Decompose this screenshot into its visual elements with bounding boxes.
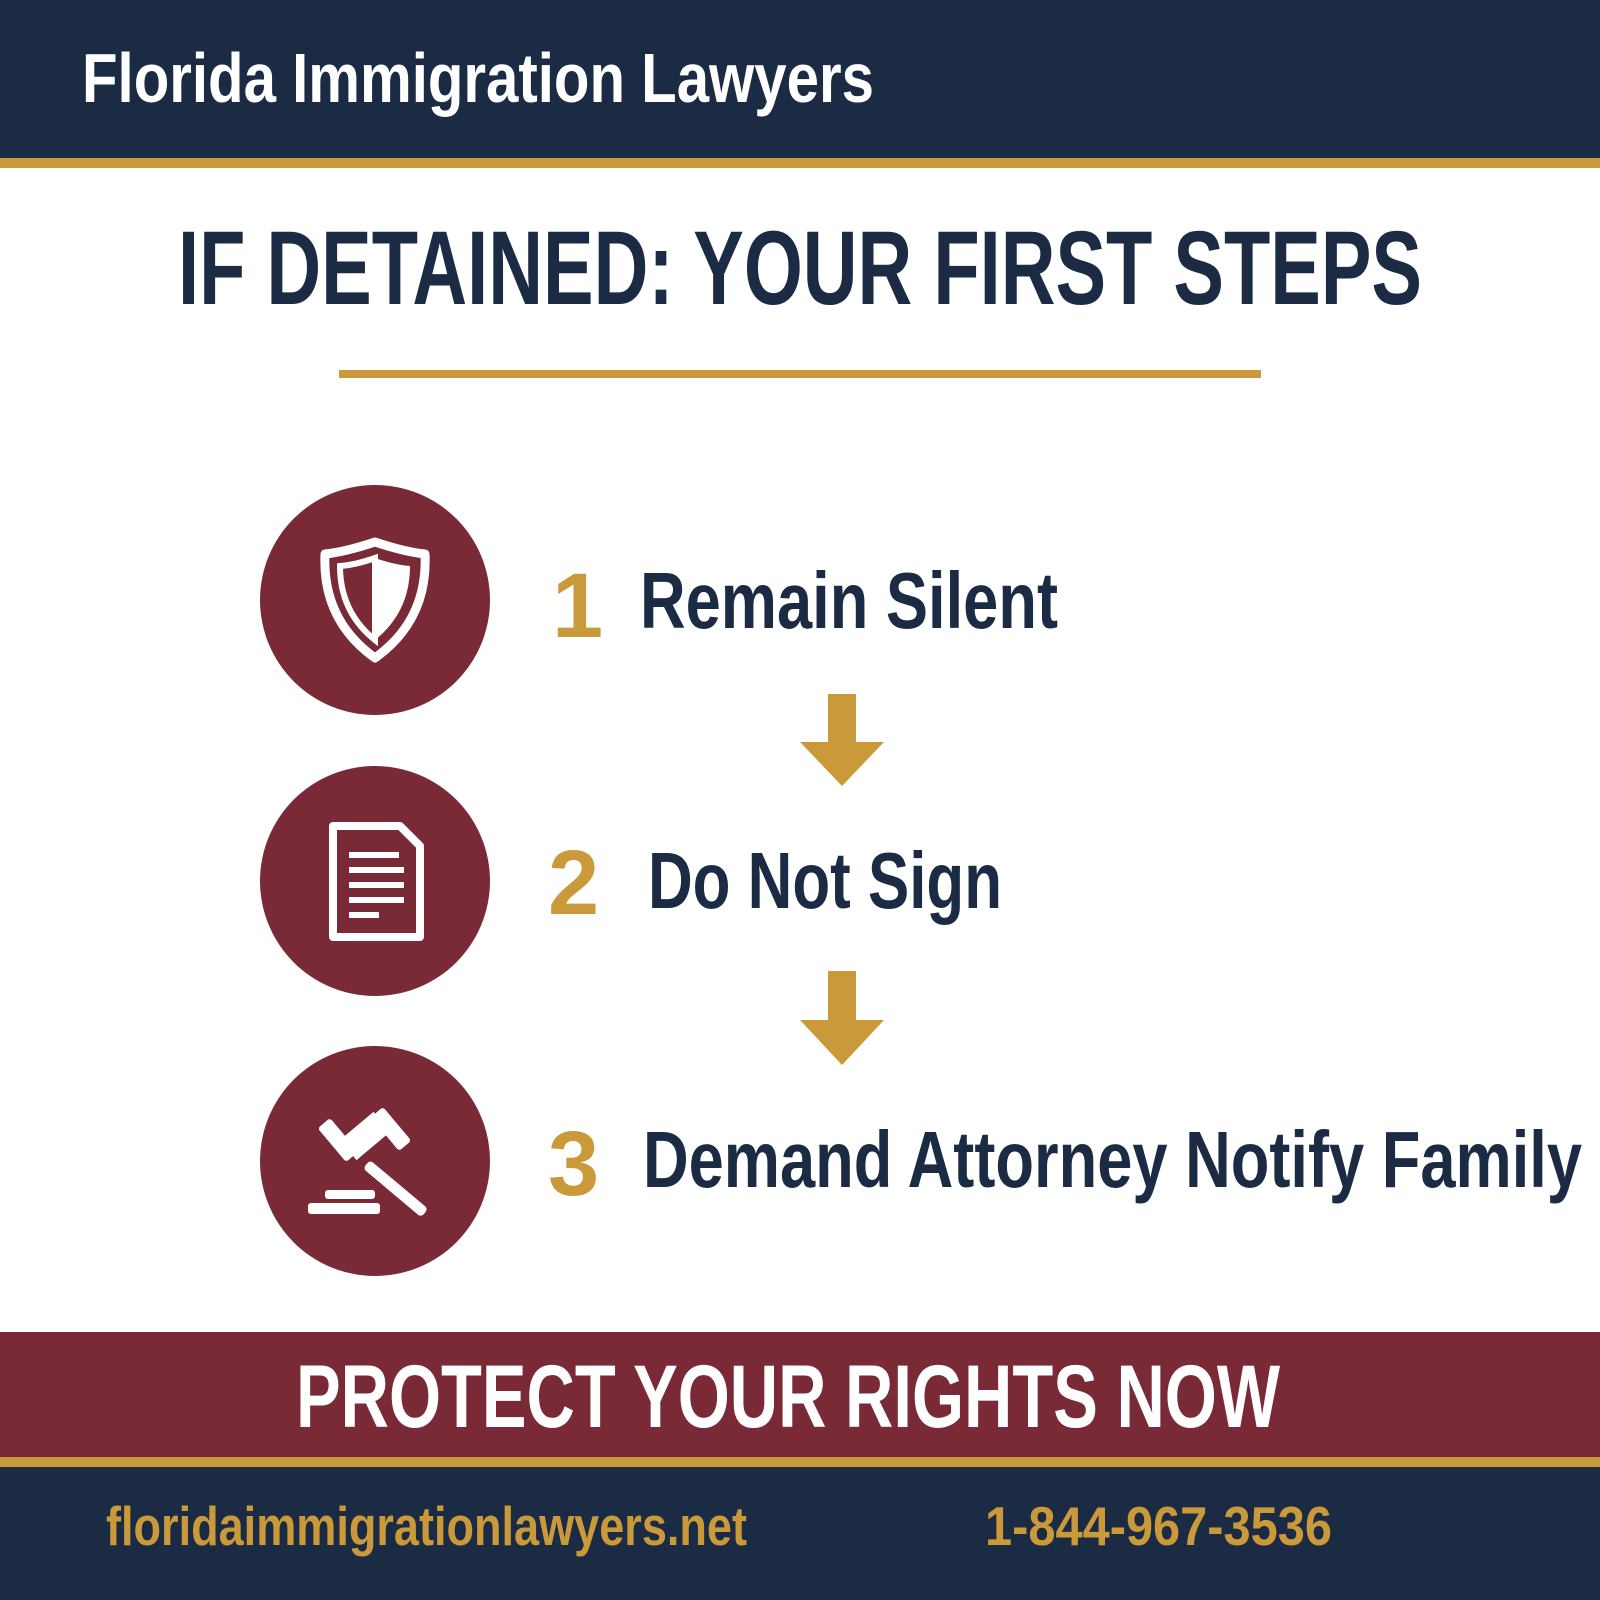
footer phone: 1-844-967-3536: [985, 1495, 1332, 1557]
step 3: [260, 1046, 1582, 1276]
arrow 2: [800, 971, 884, 1065]
number 2: 2: [548, 832, 599, 934]
icon: gavel: [260, 1046, 490, 1276]
header brand text: Florida Immigration Lawyers: [82, 39, 874, 117]
banner: protect your rights: PROTECT YOUR RIGHTS NOW: [296, 1346, 1280, 1446]
footer url: floridaimmigrationlawyers.net: [106, 1495, 747, 1557]
footer: [0, 1457, 1600, 1600]
step 1: [260, 485, 1058, 715]
icon: document: [260, 766, 490, 996]
number 1: 1: [552, 555, 603, 657]
icon: shield: [260, 485, 490, 715]
title underline: [339, 370, 1261, 378]
step 2: [260, 766, 1002, 996]
banner: protect your rights: [0, 1332, 1600, 1457]
header bar: [0, 0, 1600, 168]
arrow 1: [800, 694, 884, 786]
text: Do Not Sign: Do Not Sign: [648, 836, 1002, 925]
text: Remain Silent: Remain Silent: [640, 556, 1058, 645]
number 3: 3: [548, 1113, 599, 1215]
